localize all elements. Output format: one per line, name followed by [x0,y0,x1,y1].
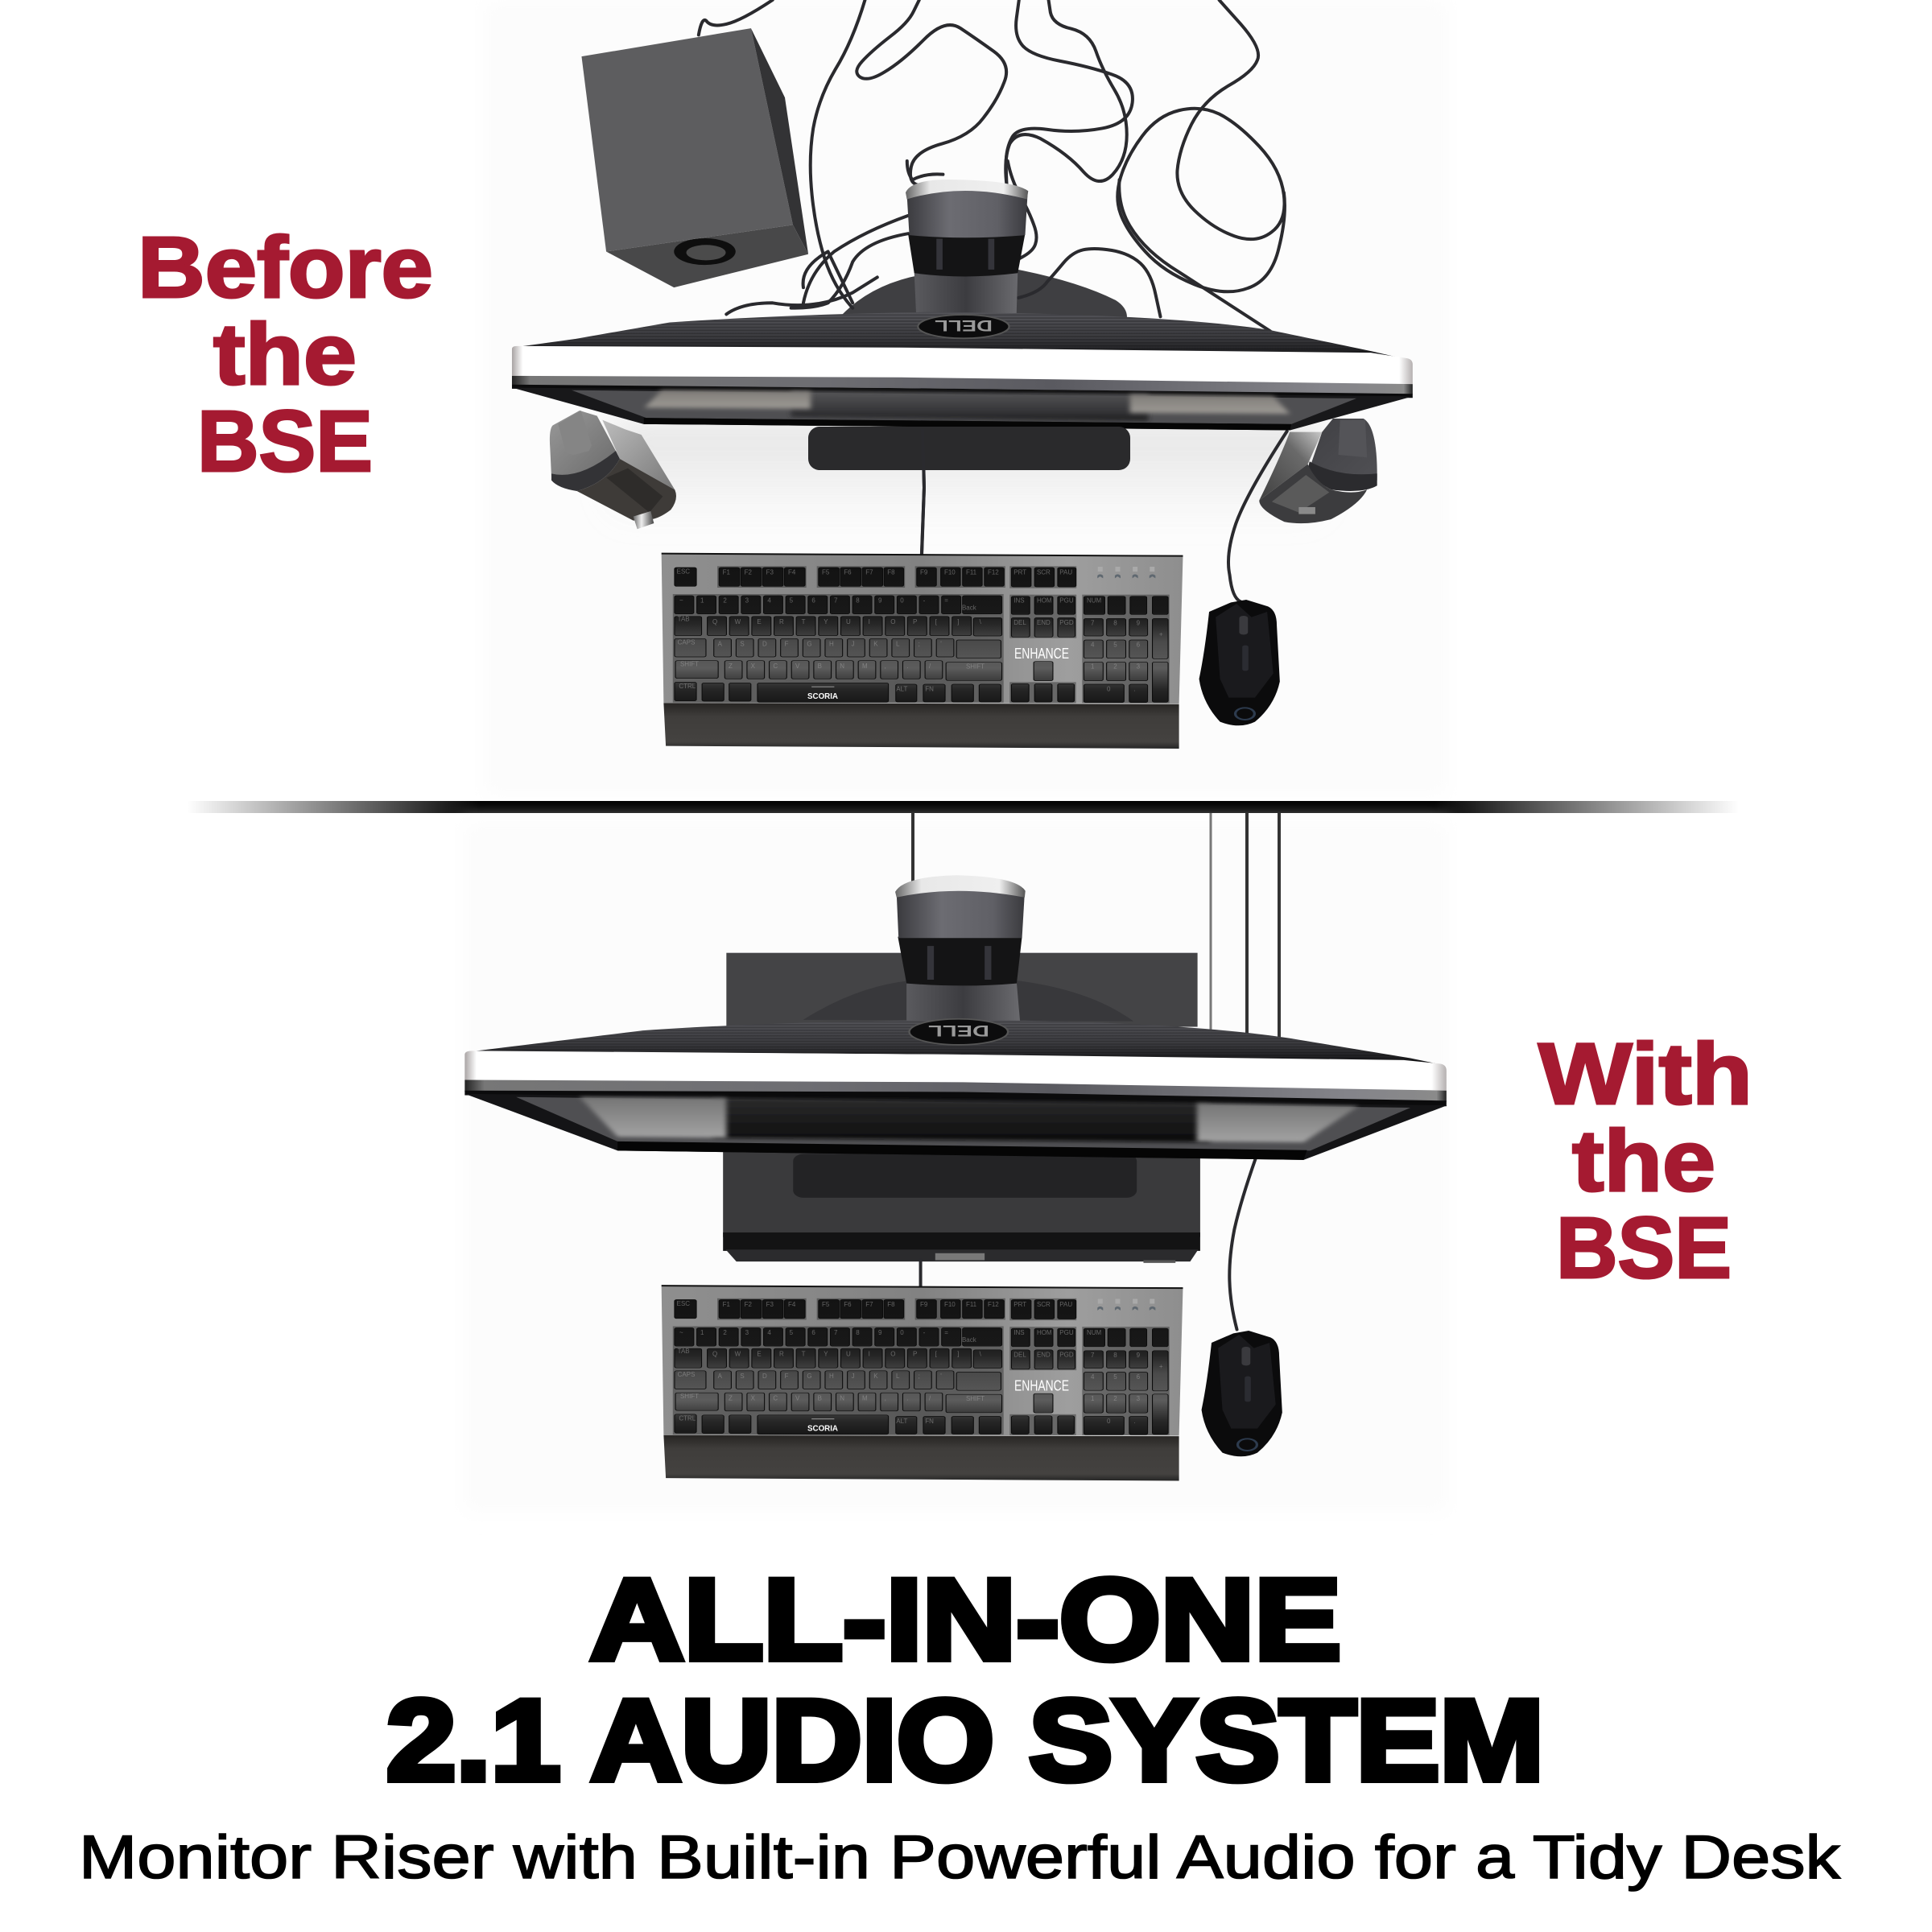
key labels: PAU [1059,1301,1072,1308]
divider bar [187,801,1739,813]
monitor logo text: DELL [927,1022,989,1038]
key labels: DEL [1013,619,1026,626]
key labels: F7 [865,1301,873,1308]
stand dome [803,980,1133,1022]
title [386,1556,1544,1805]
key labels: F5 [822,1301,830,1308]
key labels: INS [1013,1329,1025,1336]
key labels: 456 [1091,1373,1141,1381]
key labels: F7 [865,568,873,576]
tangled cables [699,0,1285,331]
key labels: 0 [1107,1418,1111,1425]
key labels: + [1159,631,1163,638]
key labels: F11 [966,1301,977,1308]
title: 2.1 AUDIO SYSTEM [386,1677,1544,1805]
key labels: END [1037,1351,1051,1358]
key labels: F8 [887,1301,895,1308]
key labels: 123 [1091,663,1141,671]
key labels: F9 [920,568,928,576]
spacebar brand: SCORIA [807,692,838,701]
key labels: PGD [1059,1351,1074,1358]
key labels: SCR [1037,568,1051,576]
key labels: PAU [1059,568,1072,576]
key labels: CTRL [679,683,696,690]
key labels: F4 [788,568,796,576]
monitor back [473,1019,1437,1063]
key labels: END [1037,619,1051,626]
mouse [1202,1331,1282,1456]
key labels: NUM [1087,1329,1101,1336]
key labels: PGU [1059,597,1074,604]
key labels: DEL [1013,1351,1026,1358]
key labels: QWERTYUIOP[] [712,1350,960,1357]
key labels: HOM [1037,597,1052,604]
key labels [677,1300,1163,1425]
key labels: F10 [944,568,956,576]
monitor [512,312,1413,430]
key labels: INS [1013,597,1025,604]
stand column [895,875,1026,1022]
key labels: ESC [677,1300,690,1307]
key labels: FN [925,685,934,692]
left satellite speaker [550,411,676,529]
keyboard brand: ENHANCE [1014,646,1069,662]
key labels: ZXCVBNM,./ [729,1394,931,1402]
heading: with the BSE: the [1572,1112,1715,1209]
heading: before the BSE: the [213,305,357,402]
key labels: . [1133,1418,1135,1425]
title: ALL-IN-ONE [590,1556,1341,1684]
monitor logo text: DELL [934,316,993,333]
subtitle: Monitor Riser with Built-in Powerful Audio for a Tidy Desk [79,1823,1841,1892]
key labels: F3 [766,1301,774,1308]
monitor top edge [464,1051,1447,1091]
key labels: ALT [896,685,907,692]
mouse and keyboard cables [922,429,1287,602]
key labels: 0 [1107,685,1111,692]
heading: with the BSE [1538,1025,1752,1296]
photo: with the BSE [463,813,1449,1513]
key labels: F8 [887,568,895,576]
riser top surface [726,953,1198,1027]
right satellite speaker [1259,419,1377,523]
key labels: TAB [678,616,690,623]
monitor stand column [906,180,1028,313]
key labels: F1 [723,1301,731,1308]
keyboard brand: ENHANCE [1014,1378,1069,1394]
key labels: HOM [1037,1329,1052,1336]
key labels: PRT [1013,568,1026,576]
key labels: \ [980,1350,982,1357]
key labels: F9 [920,1301,928,1308]
riser front [723,1151,1200,1263]
monitor neck [808,427,1130,470]
heading: before the BSE [138,218,433,489]
monitor top edge [512,346,1413,384]
key labels: F10 [944,1301,956,1308]
key labels: F11 [966,568,977,576]
key labels: CAPS [678,1371,695,1378]
key labels: QWERTYUIOP[] [712,618,960,625]
keyboard and mouse cables [921,1158,1256,1329]
mouse [1199,600,1280,725]
key labels: NUM [1087,597,1101,604]
key labels: F1 [723,568,731,576]
key labels: ALT [896,1418,907,1425]
key labels: SCR [1037,1301,1051,1308]
heading: with the BSE: BSE [1556,1199,1732,1296]
key labels: PGD [1059,619,1074,626]
key labels: F6 [844,1301,852,1308]
key labels: F2 [745,568,753,576]
key labels: SHIFT [966,663,985,671]
key labels: ZXCVBNM,./ [729,663,931,670]
key labels: SHIFT [680,660,699,667]
key labels: 789 [1091,620,1141,627]
monitor screen [516,1097,1410,1160]
key labels: F6 [844,568,852,576]
key labels: ESC [677,568,690,576]
key labels: 789 [1091,1352,1141,1359]
key labels: CTRL [679,1414,696,1422]
key labels: Back [962,604,976,611]
keyboard [662,553,1183,749]
key labels: SHIFT [966,1395,985,1402]
keyboard [662,1285,1183,1480]
key labels: F12 [988,568,999,576]
key labels: 456 [1091,641,1141,648]
key labels: FN [925,1418,934,1425]
key labels: F12 [988,1301,999,1308]
key labels: F2 [745,1301,753,1308]
heading: before the BSE: BSE [197,392,373,489]
key labels: Back [962,1336,976,1344]
key labels: PGU [1059,1329,1074,1336]
key labels: TAB [678,1348,690,1355]
monitor screen [572,390,1356,430]
key labels: F5 [822,568,830,576]
subwoofer box [581,28,808,287]
photo: before the BSE [483,0,1449,797]
key labels: F4 [788,1301,796,1308]
key labels: ASDFGHJKL;' [718,1373,942,1380]
monitor stand dome [841,270,1127,317]
key labels: ~1234567890-= [679,597,948,604]
key labels: ASDFGHJKL;' [718,641,942,648]
key labels: . [1133,685,1135,692]
heading: before the BSE: Before [138,218,433,316]
key labels: + [1159,1363,1163,1370]
key labels: \ [980,618,982,625]
key labels: SHIFT [680,1393,699,1400]
spacebar brand: SCORIA [807,1425,838,1433]
key labels [677,568,1163,692]
monitor back [520,312,1402,358]
key labels: F3 [766,568,774,576]
riser cables [913,813,1279,1038]
key labels: 123 [1091,1395,1141,1402]
key labels: PRT [1013,1301,1026,1308]
heading: with the BSE: With [1538,1025,1752,1122]
key labels: ~1234567890-= [679,1329,948,1336]
key labels: CAPS [678,639,695,646]
